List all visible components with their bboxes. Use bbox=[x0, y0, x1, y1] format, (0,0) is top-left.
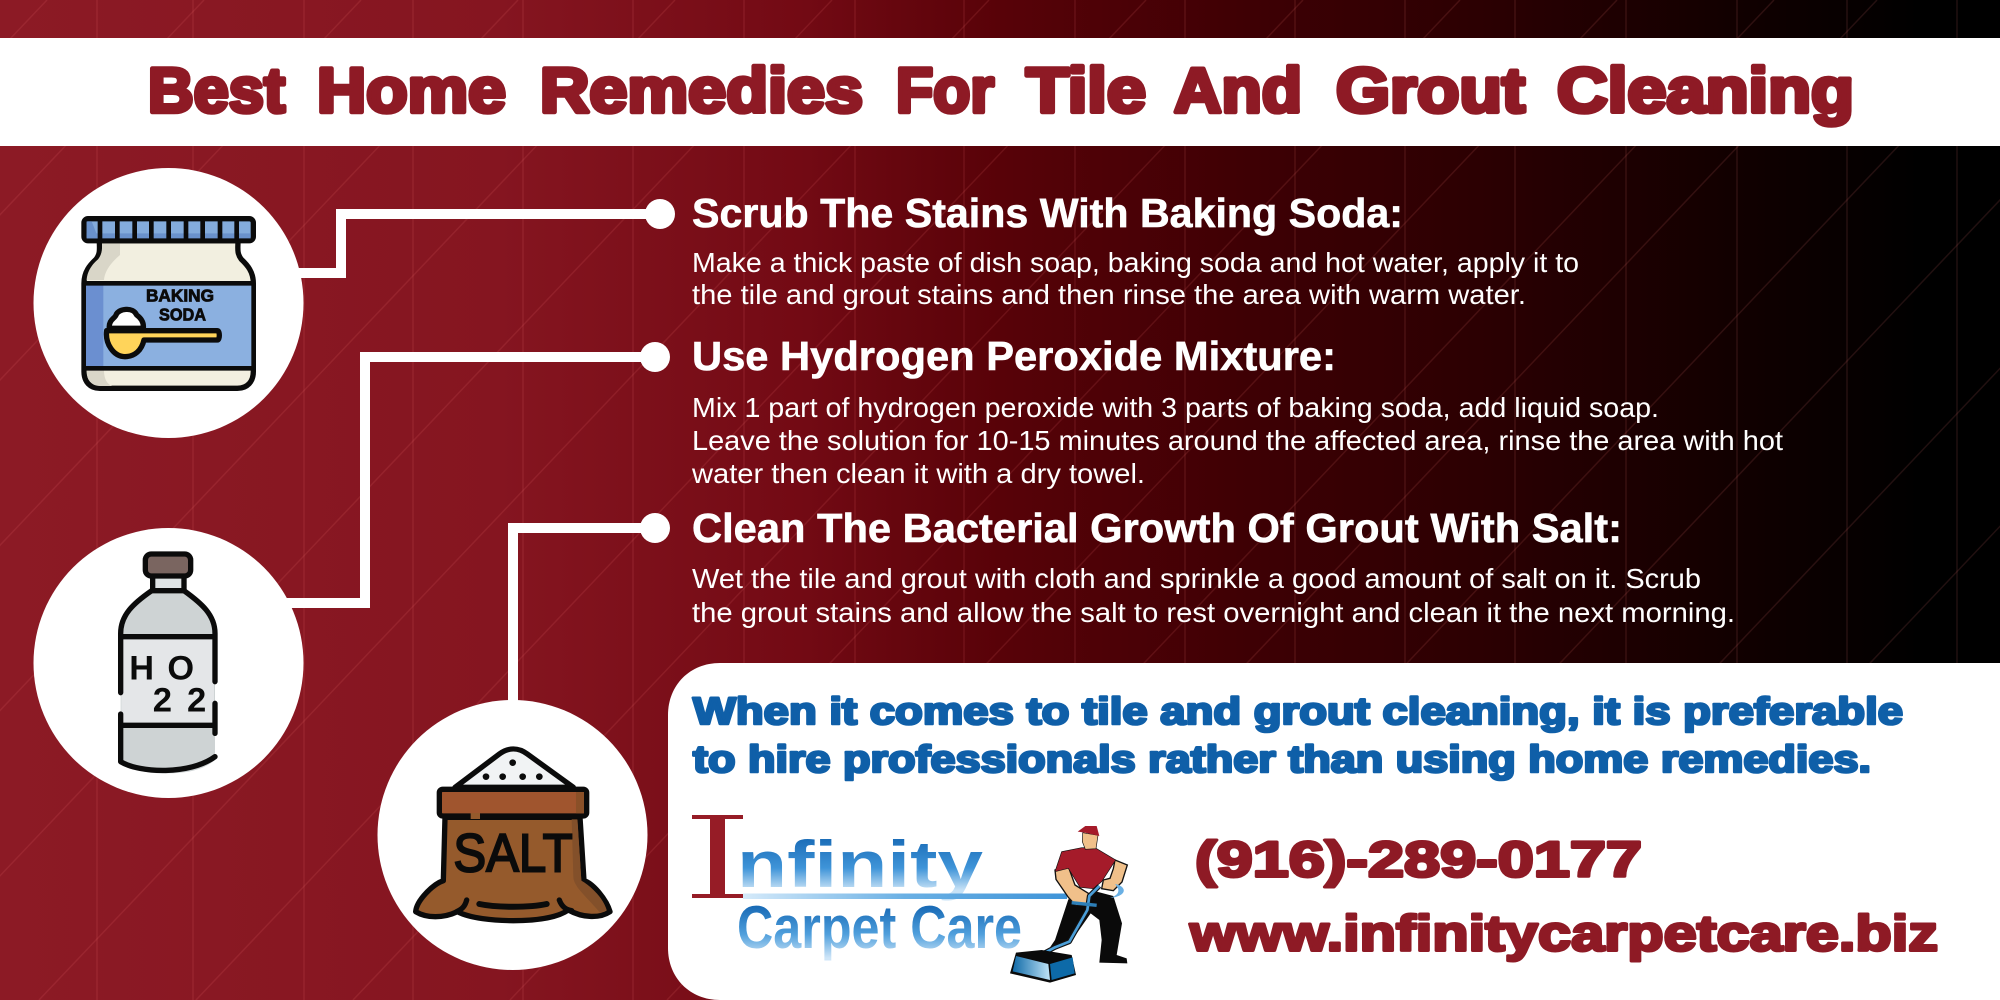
text: hydrogen peroxide: Use Hydrogen Peroxide Mixture: bbox=[692, 333, 1336, 379]
title: Cleaning bbox=[1557, 56, 1854, 126]
title: And bbox=[1174, 56, 1302, 126]
title: Grout bbox=[1336, 56, 1525, 126]
icon: hydrogen peroxide bottle: O bbox=[167, 649, 194, 687]
icon: baking soda jar bbox=[34, 168, 304, 438]
icon: baking soda jar: BAKING bbox=[146, 286, 214, 306]
title: Best bbox=[148, 56, 285, 126]
connector 2 dot bbox=[640, 342, 670, 372]
title: For bbox=[896, 56, 994, 126]
callout text bbox=[693, 691, 1903, 781]
text: hydrogen peroxide: Leave the solution for 10-15 minutes around the affected area, rinse the area with hot bbox=[692, 425, 1783, 456]
logo: Infinity Carpet Care: nfinity bbox=[737, 827, 983, 901]
title: Remedies bbox=[540, 56, 863, 126]
text: salt: Wet the tile and grout with cloth and sprinkle a good amount of salt on it. Scrub bbox=[692, 563, 1701, 594]
text: hydrogen peroxide: Mix 1 part of hydrogen peroxide with 3 parts of baking soda, add liquid soap. bbox=[692, 392, 1659, 423]
icon: hydrogen peroxide bottle: 2 bbox=[187, 681, 206, 719]
text: salt bbox=[692, 505, 1735, 628]
logo: Infinity Carpet Care: Carpet Care bbox=[737, 894, 1022, 961]
connector 3 dot bbox=[640, 513, 670, 543]
connector 1 bbox=[290, 214, 660, 273]
website: www.infinitycarpetcare.biz bbox=[1189, 906, 1938, 962]
title bbox=[148, 56, 1854, 126]
title banner bbox=[0, 38, 2000, 146]
callout text: to hire professionals rather than using home remedies. bbox=[693, 739, 1871, 781]
icon: hydrogen peroxide bottle: 2 bbox=[153, 681, 172, 719]
text: hydrogen peroxide: water then clean it with a dry towel. bbox=[691, 458, 1145, 489]
icon: hydrogen peroxide bottle: H bbox=[129, 649, 154, 687]
text: hydrogen peroxide bbox=[691, 333, 1783, 489]
callout text: When it comes to tile and grout cleaning, it is preferable bbox=[693, 691, 1903, 733]
text: baking soda: Scrub The Stains With Baking Soda: bbox=[692, 190, 1403, 236]
connector 3 bbox=[513, 528, 655, 710]
connector 2 bbox=[280, 357, 655, 603]
icon: hydrogen peroxide bottle bbox=[34, 528, 304, 798]
phone number: (916)-289-0177 bbox=[1195, 832, 1642, 888]
text: baking soda: the tile and grout stains and then rinse the area with warm water. bbox=[692, 279, 1526, 310]
panel: call to action bbox=[668, 663, 2000, 1000]
title: Tile bbox=[1026, 56, 1146, 126]
logo: Infinity Carpet Care bbox=[692, 815, 1127, 983]
logo worker figure bbox=[1010, 826, 1127, 983]
text: baking soda: Make a thick paste of dish soap, baking soda and hot water, apply it to bbox=[692, 247, 1579, 278]
connector 1 dot bbox=[645, 199, 675, 229]
title: Home bbox=[317, 56, 506, 126]
icon: baking soda jar: SODA bbox=[159, 305, 206, 325]
text: baking soda bbox=[692, 190, 1579, 310]
icon: salt bag bbox=[378, 700, 648, 970]
text: salt: Clean The Bacterial Growth Of Grout With Salt: bbox=[692, 505, 1622, 551]
icon: salt bag: SALT bbox=[453, 824, 573, 884]
text: salt: the grout stains and allow the salt to rest overnight and clean it the next morning. bbox=[692, 597, 1735, 628]
